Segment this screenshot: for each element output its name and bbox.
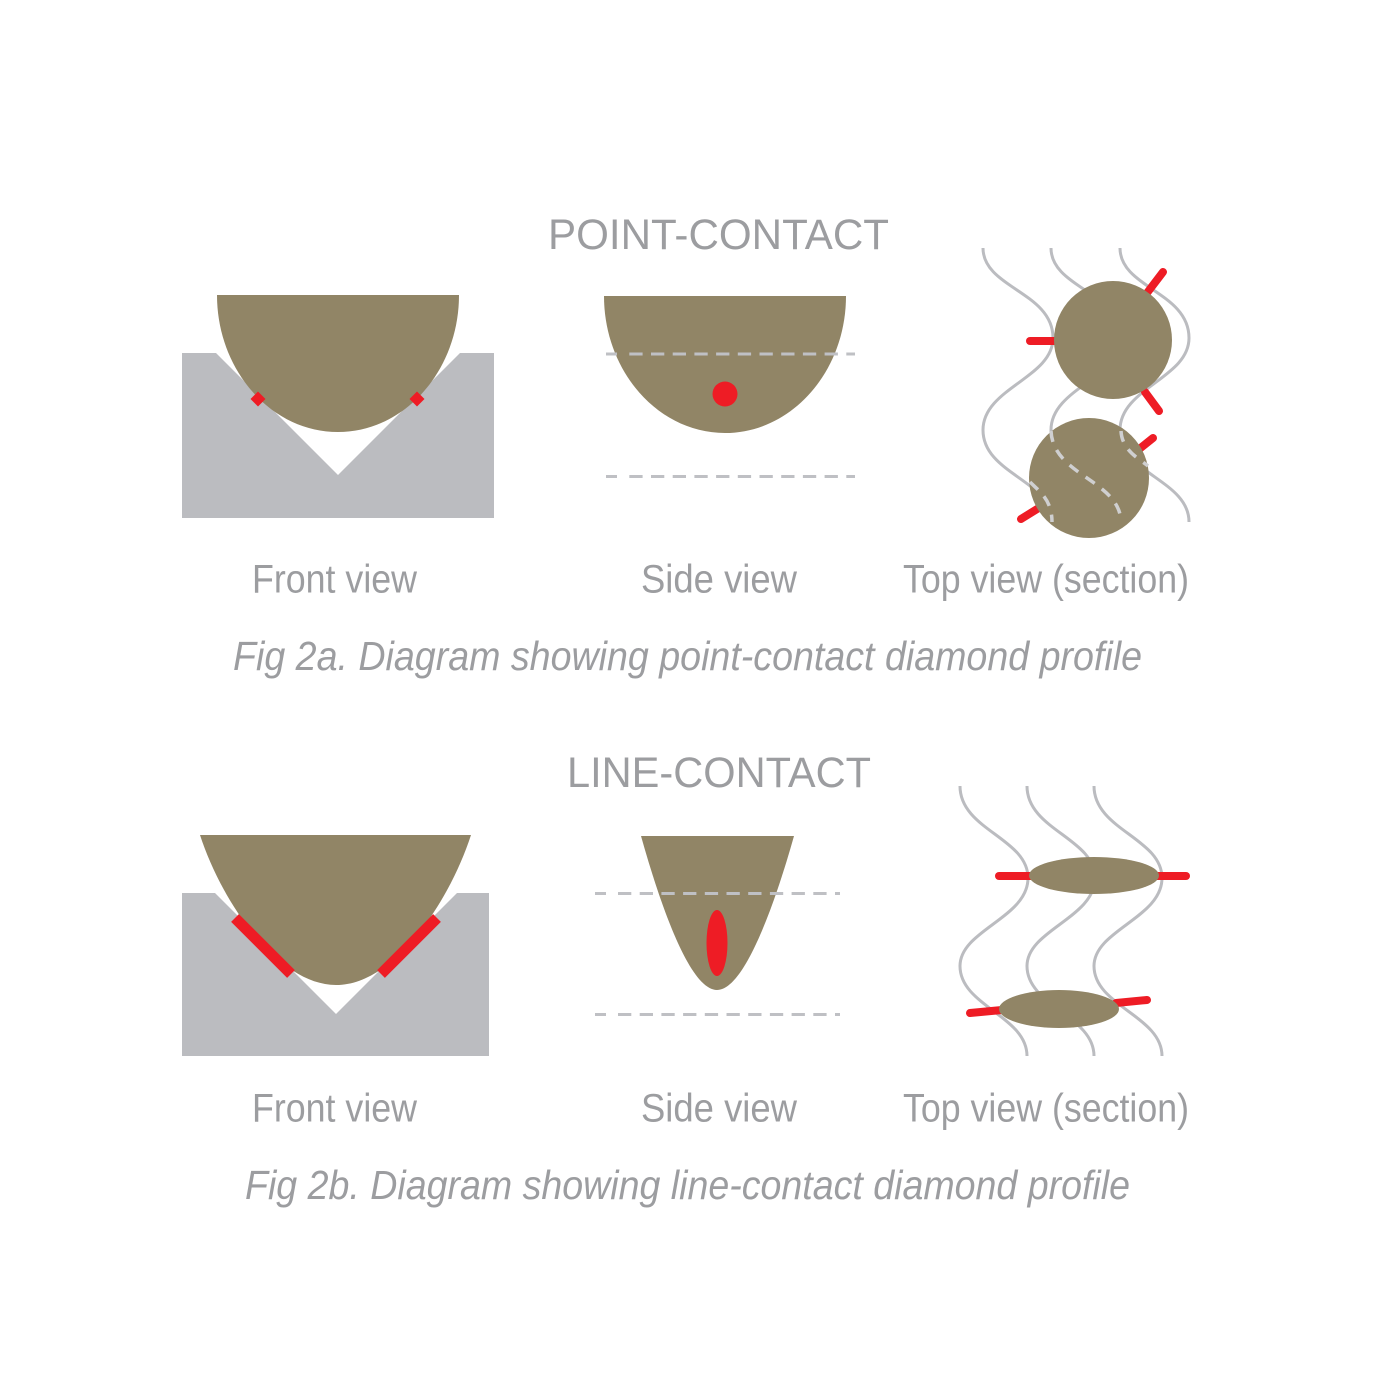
label: side view: Side view: [641, 1086, 797, 1130]
diagram: point-contact side view: [604, 296, 855, 476]
label: top view section: Top view (section): [903, 558, 1189, 602]
diagram: point-contact front view: [182, 295, 494, 518]
caption: fig 2a: Fig 2a. Diagram showing point-contact diamond profile: [233, 633, 1142, 679]
title: line-contact: LINE-CONTACT: [567, 749, 871, 797]
label: side view: Side view: [641, 558, 797, 602]
diagram: line-contact top view section: [960, 786, 1186, 1056]
diagram: line-contact front view: [182, 835, 489, 1056]
label: front view: Front view: [252, 1086, 417, 1130]
label: top view section: Top view (section): [903, 1086, 1189, 1130]
title: point-contact: POINT-CONTACT: [548, 211, 889, 259]
label: front view: Front view: [252, 558, 417, 602]
caption: fig 2b: Fig 2b. Diagram showing line-contact diamond profile: [245, 1162, 1130, 1208]
diagram: point-contact top view section: [983, 248, 1189, 538]
diagram: line-contact side view: [595, 836, 840, 1014]
